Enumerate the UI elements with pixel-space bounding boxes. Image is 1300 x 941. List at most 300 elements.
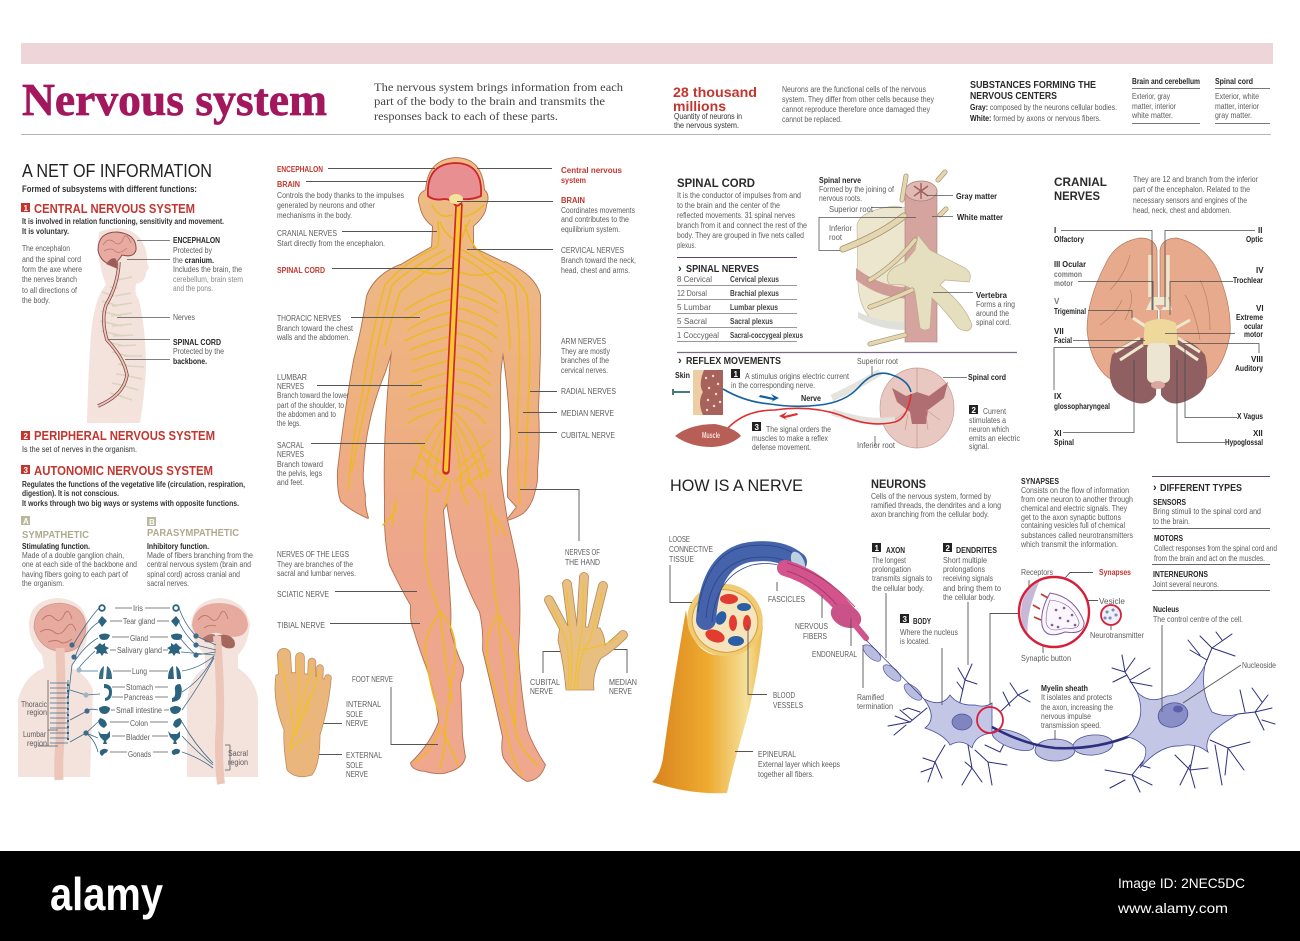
top band	[21, 43, 1273, 64]
nerve pathways	[832, 372, 895, 421]
labels: nerve bundle: External layer which keeps	[758, 760, 840, 769]
synapses text	[1020, 477, 1133, 549]
heading: cranial nerves	[1054, 175, 1107, 203]
cranial description: necessary sensors and engines of the	[1133, 196, 1247, 205]
neuron leaders	[886, 572, 1241, 740]
table: substances: Exterior, white	[1215, 92, 1259, 101]
neuron part: axon: 1	[874, 544, 880, 553]
labels: body left: NERVES	[277, 382, 304, 391]
column: sympathetic: one at each side of the backbone and	[22, 560, 137, 569]
neuron part: dendrites: and bring them to	[943, 584, 1002, 593]
body silhouette	[338, 158, 545, 781]
axis note: and the spinal cord	[22, 255, 81, 264]
neuron part: body: Where the nucleus	[900, 628, 958, 637]
callouts: spine figure: Protected by the	[173, 347, 224, 356]
cranial labels: Auditory	[1235, 364, 1263, 373]
section 3 text: Regulates the functions of the vegetative life (circulation, respiration,	[22, 480, 245, 489]
labels: body right: MEDIAN NERVE	[561, 409, 614, 418]
callouts: spine figure: the cranium.	[173, 256, 214, 265]
neurons note	[782, 85, 934, 124]
labels: body right: Central nervous	[561, 166, 623, 175]
organ labels: Sacral	[228, 749, 248, 758]
table: spinal nerves: SPINAL NERVES	[686, 263, 759, 275]
reflex labels: Inferior root	[857, 441, 896, 450]
labels: body left: TIBIAL NERVE	[277, 621, 325, 630]
column: parasympathetic: Made of fibers branching from the	[147, 551, 253, 560]
left body	[18, 598, 93, 780]
right body	[187, 598, 258, 784]
labels: nerve bundle: VESSELS	[773, 701, 803, 710]
table: substances: gray matter.	[1215, 111, 1252, 120]
spinal cord description: plexus.	[677, 241, 696, 250]
labels: body left: THORACIC NERVES	[277, 314, 341, 323]
labels: body left: INTERNAL	[346, 700, 381, 709]
neuron part: dendrites: DENDRITES	[956, 546, 998, 555]
neuron body left	[924, 695, 992, 748]
organ labels: Bladder	[126, 733, 150, 742]
callouts: spine figure	[108, 236, 243, 366]
organ labels: Small intestine	[116, 706, 162, 715]
labels: body left: part of the shoulder, to	[277, 401, 344, 410]
intro text: The nervous system brings information from each	[374, 82, 623, 94]
labels: body left: Controls the body thanks to the impulses	[277, 191, 404, 200]
organ labels: Pancreas	[124, 693, 153, 702]
labels: body right: NERVES OF	[565, 548, 600, 557]
intro text: part of the body to the brain and transmits the	[374, 96, 605, 108]
section 1 heading: CENTRAL NERVOUS SYSTEM	[34, 201, 195, 216]
callouts: spinal illustration: White matter	[957, 213, 1003, 222]
labels: body left: SACRAL	[277, 441, 304, 450]
reflex labels: emits an electric	[969, 434, 1020, 443]
different types: DIFFERENT TYPES	[1160, 482, 1242, 494]
different types: SENSORS	[1153, 498, 1187, 507]
table: spinal nerves: Sacral-coccygeal plexus	[730, 331, 803, 340]
neuron part: body	[900, 614, 958, 646]
muscle	[675, 424, 741, 447]
cranial labels	[1054, 226, 1264, 447]
table: substances: white matter.	[1131, 111, 1173, 120]
neurons description: Cells of the nervous system, formed by	[871, 492, 991, 501]
labels: body right: system	[561, 176, 586, 185]
cranial labels: I	[1054, 226, 1056, 235]
cranial labels: Hypoglossal	[1225, 438, 1263, 447]
limb nerves	[348, 205, 538, 775]
synapse detail	[1019, 577, 1089, 647]
neuron part: axon	[872, 543, 932, 593]
organ labels: region	[228, 758, 248, 767]
callouts: spine figure: backbone.	[173, 357, 207, 366]
stat: neuron quantity	[673, 84, 757, 130]
organ labels: Salivary gland	[117, 646, 162, 655]
diagram: autonomic system	[18, 598, 258, 784]
callouts: spinal illustration: Formed by the joining of	[819, 185, 895, 194]
cranial labels: Optic	[1246, 235, 1263, 244]
muscle: Muscle	[702, 431, 720, 440]
nerve connections	[38, 608, 230, 770]
column: sympathetic: the organism.	[22, 579, 64, 588]
reflex labels: signal.	[969, 442, 989, 451]
different types	[1152, 476, 1277, 590]
section 2 heading: PERIPHERAL NERVOUS SYSTEM	[34, 428, 215, 443]
labels: body right: head, chest and arms.	[561, 266, 630, 275]
column: parasympathetic: spinal cord) across cranial and	[147, 570, 240, 579]
table: spinal nerves: 1 Coccygeal	[677, 331, 719, 340]
neuron labels: nervous impulse	[1041, 712, 1091, 721]
synapses text: get to the axon synaptic buttons	[1021, 513, 1121, 522]
panel: a net of information	[18, 161, 258, 784]
spinal cord description: reflected movements. 31 spinal nerves	[677, 211, 795, 220]
panel: how is a nerve	[652, 476, 893, 793]
labels: nerve bundle: ENDONEURAL	[812, 650, 857, 659]
labels: body right: They are mostly	[561, 347, 610, 356]
cranial labels: XII	[1253, 429, 1263, 438]
substances note: Gray: composed by the neurons cellular bodies.	[970, 103, 1117, 112]
synapses text: Consists on the flow of information	[1021, 486, 1129, 495]
labels: body right: BRAIN	[561, 196, 585, 205]
footer bar: Image ID: 2NEC5DC	[1118, 875, 1245, 891]
sacral plexus	[412, 412, 490, 505]
figure: side body with spine	[87, 228, 149, 423]
footer bar	[0, 851, 1300, 941]
column: sympathetic: SYMPATHETIC	[22, 530, 89, 541]
neuron part: dendrites: 2	[946, 544, 950, 553]
reflex labels	[731, 357, 1020, 452]
reflex labels: Nerve	[801, 394, 821, 403]
labels: body right: cervical nerves.	[561, 366, 608, 375]
organ labels: Stomach	[126, 683, 153, 692]
reflex labels: Superior root	[857, 357, 899, 366]
labels: body left: the abdomen and to	[277, 410, 336, 419]
cranial labels: Spinal	[1054, 438, 1074, 447]
synapses text: chemical and electric signals. They	[1021, 504, 1127, 513]
cranial labels: ocular	[1244, 322, 1263, 331]
different types: Bring stimuli to the spinal cord and	[1153, 507, 1261, 516]
substances note	[970, 80, 1117, 123]
neuron labels: transmission speed.	[1041, 721, 1101, 730]
cranial labels: Trigeminal	[1054, 307, 1086, 316]
labels: nerve bundle: LOOSE	[669, 535, 690, 544]
labels: nerve bundle: EPINEURAL	[758, 750, 796, 759]
callouts: spinal illustration: root	[829, 233, 843, 242]
different types: Joint several neurons.	[1153, 580, 1219, 589]
labels: body left: CRANIAL NERVES	[277, 229, 337, 238]
panel: neurons	[860, 476, 1277, 792]
cranial labels: Olfactory	[1054, 235, 1084, 244]
different types: from the brain and act on the muscles.	[1154, 554, 1265, 563]
labels: body left: the pelvis, legs	[277, 469, 322, 478]
different types: to the brain.	[1153, 517, 1190, 526]
neurons note: cannot reproduce therefore once damaged they	[782, 105, 930, 114]
table: spinal nerves: 12 Dorsal	[677, 289, 707, 298]
table: substances: Exterior, gray	[1132, 92, 1170, 101]
cranial description: head, neck, chest and abdomen.	[1133, 206, 1231, 215]
spinal cord core	[446, 205, 459, 470]
section 3 heading: AUTONOMIC NERVOUS SYSTEM	[34, 463, 213, 478]
labels: body left: the legs.	[277, 419, 301, 428]
reflex movements	[673, 352, 1020, 452]
section 1 text: It is involved in relation functioning, sensitivity and movement.	[22, 217, 224, 226]
labels: body left: They are branches of the	[277, 560, 353, 569]
labels: body left: Branch toward the lower	[277, 391, 349, 400]
reflex labels: in the corresponding nerve.	[731, 381, 815, 390]
substances note: White: formed by axons or nervous fibers.	[970, 114, 1101, 123]
brain highlighted	[428, 163, 481, 206]
synapses text: which transmit the information.	[1020, 540, 1118, 549]
cranial labels: III Ocular	[1054, 260, 1086, 269]
reflex labels: The signal orders the	[766, 425, 831, 434]
labels: body left: NERVE	[346, 719, 368, 728]
labels: nerve bundle	[669, 535, 893, 779]
reflex labels: 3	[754, 423, 760, 432]
organ labels: Thoracic	[21, 700, 47, 709]
myelin segments near nerve	[860, 640, 925, 703]
neuron labels: Nucleoside	[1242, 661, 1276, 670]
neurons description	[871, 492, 1001, 519]
callouts: spine figure: Nerves	[173, 313, 195, 322]
different types: MOTORS	[1154, 534, 1184, 543]
illustration: neuron chain	[860, 632, 1275, 792]
panel: cranial nerves	[1054, 175, 1264, 447]
figure: human body nervous system	[338, 158, 545, 781]
callouts: spine figure: Includes the brain, the	[173, 265, 242, 274]
section 3 text: digestion). It is not conscious.	[22, 489, 119, 498]
neurons description: axon branching from the cellular body.	[871, 510, 989, 519]
labels: body left: SOLE	[346, 761, 363, 770]
neuron labels: Nucleus	[1153, 605, 1179, 614]
reflex labels: 1	[734, 370, 738, 379]
section 2 heading: 2	[24, 432, 28, 441]
organ labels: Colon	[130, 719, 148, 728]
skin section	[693, 370, 723, 415]
heading: cranial nerves: CRANIAL	[1054, 175, 1107, 189]
intro text: responses back to each of these parts.	[374, 111, 558, 123]
different types: INTERNEURONS	[1153, 570, 1209, 579]
reflex labels: muscles to make a reflex	[752, 434, 828, 443]
neurons description: ramified threads, the dendrites and a long	[871, 501, 1001, 510]
table: spinal nerves: Brachial plexus	[730, 289, 779, 298]
reflex labels: A stimulus origins electric current	[745, 372, 850, 381]
labels: body right: Branch toward the neck,	[561, 256, 636, 265]
callouts: spinal illustration: Gray matter	[956, 192, 997, 201]
table: spinal nerves: 8 Cervical	[677, 275, 712, 284]
table: spinal nerves: 5 Lumbar	[677, 303, 711, 312]
cranial labels: II	[1258, 226, 1262, 235]
labels: body right: MEDIAN	[609, 678, 637, 687]
heading: net of information: A NET OF INFORMATION	[22, 161, 212, 181]
labels: body right: CUBITAL	[530, 678, 560, 687]
table: spinal nerves: ›	[678, 263, 682, 275]
neuron part: axon: the cellular body.	[872, 584, 924, 593]
table: substances	[1131, 77, 1270, 124]
illustration: brain underside	[1087, 238, 1230, 404]
heading: spinal cord: SPINAL CORD	[677, 176, 755, 190]
column: parasympathetic: B	[149, 518, 155, 527]
table: substances: Brain and cerebellum	[1132, 77, 1200, 86]
neuron part: dendrites: the cellular body.	[943, 593, 995, 602]
labels: body left: BRAIN	[277, 180, 300, 189]
neuron body right	[1127, 665, 1238, 768]
labels: body left: ENCEPHALON	[277, 165, 323, 174]
nucleus left	[952, 714, 972, 730]
labels: body left: walls and the abdomen.	[276, 333, 350, 342]
axis note: the body.	[22, 296, 50, 305]
neuron labels: Neurotransmitter	[1090, 631, 1144, 640]
labels: body right: ARM NERVES	[561, 337, 606, 346]
labels: nerve bundle: CONNECTIVE	[669, 545, 713, 554]
neurons note: Neurons are the functional cells of the nervous	[782, 85, 926, 94]
cranial labels: XI	[1054, 429, 1062, 438]
column: parasympathetic: Inhibitory function.	[147, 542, 209, 551]
neuron part: axon: transmits signals to	[872, 574, 932, 583]
axis note: to all directions of	[22, 286, 78, 295]
organ labels	[21, 604, 248, 767]
neuron labels	[1021, 568, 1276, 730]
callouts: spinal illustration: Forms a ring	[976, 300, 1015, 309]
vesicle detail	[1101, 605, 1121, 625]
organ labels: Iris	[133, 604, 143, 613]
reflex movements: REFLEX MOVEMENTS	[686, 355, 781, 367]
labels: body left: SOLE	[346, 710, 363, 719]
labels: body right: RADIAL NERVES	[561, 387, 616, 396]
neurons note: cannot be replaced.	[782, 115, 842, 124]
table: substances: matter, interior	[1132, 102, 1176, 111]
thoracic and lumbar nerves	[405, 284, 498, 424]
labels: body right: branches of the	[561, 356, 609, 365]
labels: nerve bundle: together all fibers.	[758, 770, 814, 779]
labels: nerve bundle: TISSUE	[669, 555, 694, 564]
callouts: spinal illustration: Inferior	[829, 224, 852, 233]
table: spinal nerves: Lumbar plexus	[730, 303, 778, 312]
cranial labels: X Vagus	[1237, 412, 1263, 421]
callouts: spine figure: SPINAL CORD	[173, 338, 221, 347]
spinal cord description: body. They are grouped in five nets called	[677, 231, 804, 240]
callouts: spine figure: ENCEPHALON	[173, 236, 220, 245]
axis note: The encephalon	[22, 244, 70, 253]
panel: spinal cord	[673, 172, 1020, 452]
red arrow	[779, 412, 798, 420]
dendrites	[888, 632, 1275, 792]
organ labels: Lung	[132, 667, 147, 676]
axis note	[22, 244, 82, 305]
stat: neuron quantity: Quantity of neurons in	[674, 112, 742, 121]
synapses text: SYNAPSES	[1021, 477, 1060, 486]
needle	[673, 389, 690, 395]
callouts: spinal illustration: Vertebra	[976, 291, 1008, 300]
section 2 text: Is the set of nerves in the organism.	[22, 445, 137, 454]
neuron labels: Myelin sheath	[1041, 684, 1088, 693]
labels: body right: Coordinates movements	[561, 206, 635, 215]
neurons note: system. They differ from other cells because they	[782, 95, 934, 104]
organ labels: Gland	[130, 634, 148, 643]
labels: body left: SCIATIC NERVE	[277, 590, 329, 599]
axon and myelin	[990, 725, 1130, 761]
callouts: spinal illustration: spinal cord.	[976, 318, 1011, 327]
labels: nerve bundle: NERVOUS	[795, 622, 828, 631]
labels: body right: CUBITAL NERVE	[561, 431, 615, 440]
cranial description	[1133, 175, 1258, 215]
neuron part: dendrites: Short multiple	[943, 556, 987, 565]
blue arrow	[759, 394, 779, 402]
cranial labels: Facial	[1054, 336, 1072, 345]
illustration: vertebra and spinal cord	[843, 172, 972, 344]
section 3 heading: 3	[24, 466, 28, 475]
reflex labels: Current	[983, 407, 1007, 416]
reflex movements: Skin	[675, 371, 690, 380]
spinal cord description: It is the conductor of impulses from and	[677, 191, 801, 200]
neuron part: body: is located.	[900, 637, 930, 646]
labels: body left: NERVES	[277, 450, 304, 459]
organ labels: region	[27, 708, 47, 717]
cranial labels: Extreme	[1236, 313, 1263, 322]
column: sympathetic: having fibers going to each part of	[22, 570, 129, 579]
callouts: spinal illustration: nervous roots.	[819, 194, 862, 203]
reflex labels: 2	[972, 406, 976, 415]
column: sympathetic	[21, 516, 137, 588]
labels: body left: Branch toward	[277, 460, 323, 469]
labels: body right	[457, 166, 637, 696]
column: sympathetic: Made of a double ganglion chain,	[22, 551, 124, 560]
labels: nerve bundle: Ramified	[857, 693, 884, 702]
nucleoside	[1173, 706, 1183, 712]
illustration: nerve bundle	[652, 545, 866, 793]
illustration: hand	[549, 577, 623, 690]
section 3 text	[22, 480, 245, 508]
labels: body left: mechanisms in the body.	[277, 211, 352, 220]
stat: neuron quantity: 28 thousand	[673, 84, 757, 100]
section 1 text: It is voluntary.	[22, 227, 69, 236]
labels: body right: THE HAND	[565, 558, 600, 567]
section 1 heading: 1	[24, 204, 28, 213]
cranial description: They are 12 and branch from the inferior	[1133, 175, 1258, 184]
illustration: foot	[275, 655, 331, 777]
footer bar: alamy	[50, 868, 163, 920]
synapses text: substances called neurotransmitters	[1021, 531, 1133, 540]
labels: body left: NERVES OF THE LEGS	[277, 550, 349, 559]
neuron labels: It isolates and protects	[1041, 693, 1112, 702]
cranial labels: VIII	[1251, 355, 1263, 364]
labels: body left: SPINAL CORD	[277, 266, 325, 275]
labels: body left: FOOT NERVE	[352, 675, 393, 684]
table: spinal nerves: 5 Sacral	[677, 317, 707, 326]
heading: neurons: NEURONS	[871, 477, 926, 491]
footer bar: www.alamy.com	[1117, 900, 1228, 916]
organ labels: region	[27, 739, 47, 748]
section 3 text: It works through two big ways or systems with opposite functions.	[22, 499, 239, 508]
labels: body left: and feet.	[277, 478, 304, 487]
cranial labels: motor	[1054, 279, 1073, 288]
axis note: the nerves branch	[22, 275, 77, 284]
callouts: spine figure: cerebellum, brain stem	[173, 275, 243, 284]
cranial labels: glossopharyngeal	[1054, 402, 1110, 411]
spinal cord description	[677, 191, 807, 250]
intro text	[374, 82, 623, 123]
axis note: form the axe where	[22, 265, 82, 274]
cranial labels: common	[1054, 270, 1082, 279]
labels: body right: NERVE	[609, 687, 632, 696]
neuron labels: The control centre of the cell.	[1153, 615, 1243, 624]
column: parasympathetic	[147, 517, 253, 588]
callouts: spinal illustration: Spinal nerve	[819, 176, 861, 185]
reflex labels: Spinal cord	[968, 373, 1006, 382]
organ icons	[94, 605, 182, 756]
labels: body right: equilibrium system.	[561, 225, 620, 234]
stat: neuron quantity: the nervous system.	[674, 121, 739, 130]
neuron part: axon: The longest	[872, 556, 907, 565]
callouts: spinal illustration: Superior root	[829, 205, 874, 214]
labels: body left: EXTERNAL	[346, 751, 382, 760]
labels: body left: Branch toward the chest	[277, 324, 354, 333]
reflex labels: stimulates a	[969, 416, 1006, 425]
